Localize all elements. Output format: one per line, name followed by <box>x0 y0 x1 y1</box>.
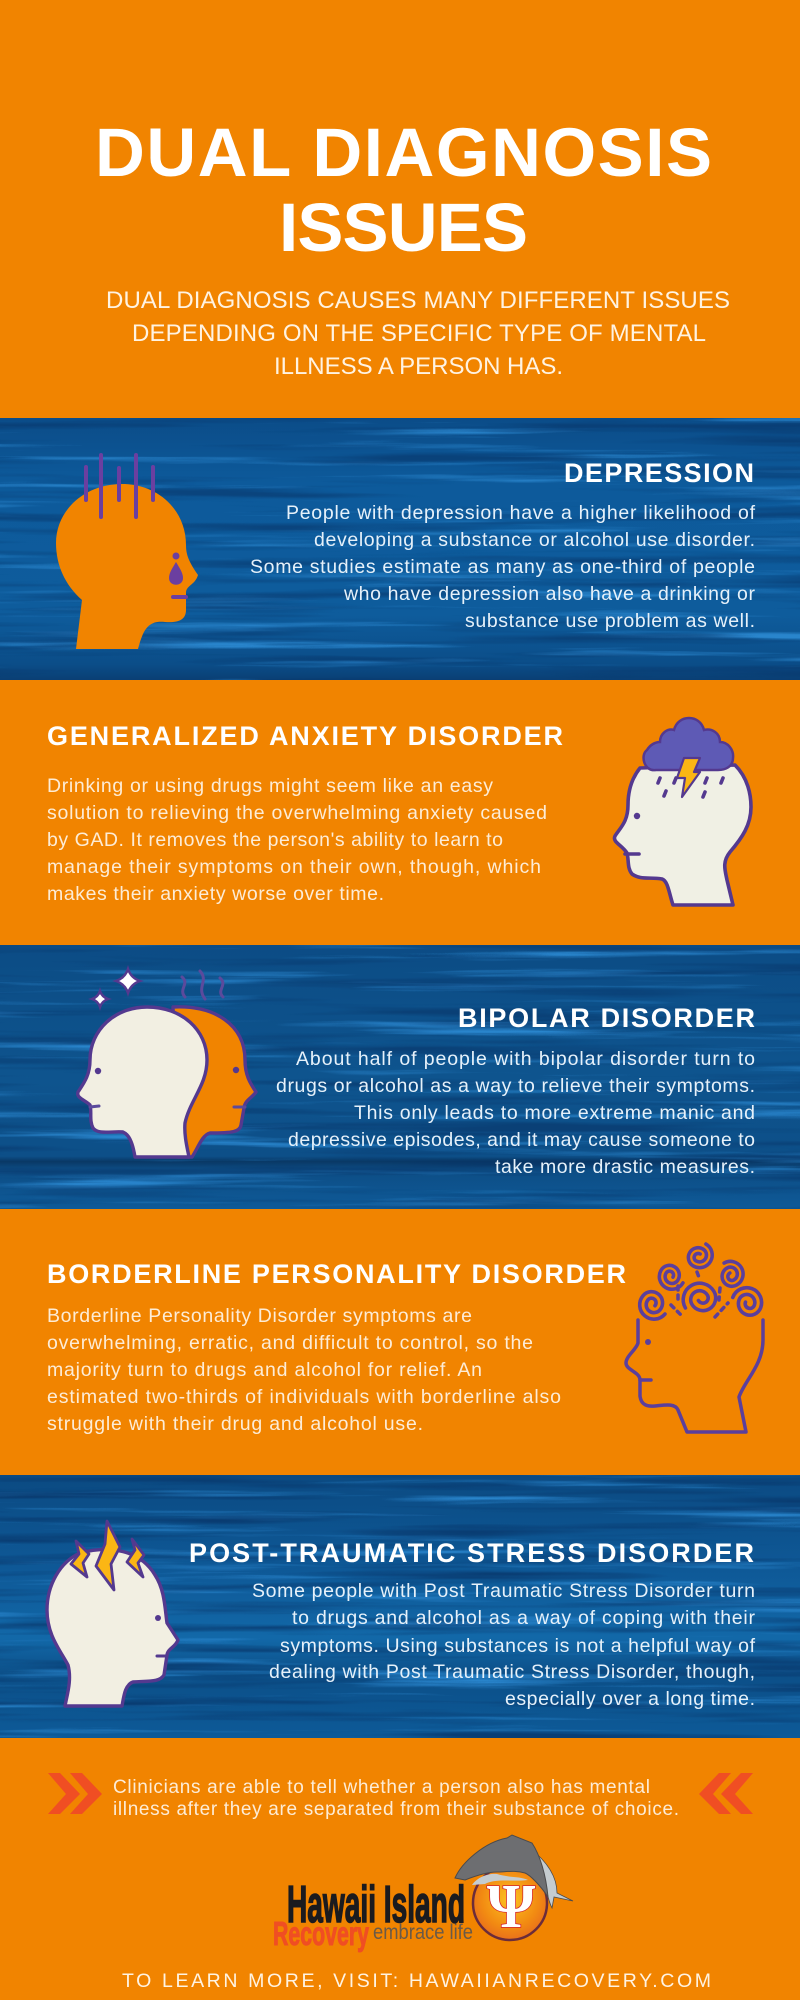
text: borderline personality disorder: struggle with their drug and alcohol use. <box>47 1413 423 1435</box>
icon: two faced heads <box>78 969 256 1157</box>
icon: head with spirals <box>626 1239 766 1432</box>
panel: bipolar disorder <box>0 945 800 1209</box>
panel: post-traumatic stress disorder <box>0 1475 800 1738</box>
text: bipolar disorder <box>276 1048 755 1178</box>
text: bipolar disorder: About half of people with bipolar disorder turn to <box>296 1048 755 1070</box>
text: post-traumatic stress disorder <box>252 1580 756 1710</box>
footer link: TO LEARN MORE, VISIT: HAWAIIANRECOVERY.COM <box>122 1970 711 1992</box>
text: borderline personality disorder: estimated two-thirds of individuals with borderline also <box>47 1386 561 1408</box>
heading: bipolar disorder: BIPOLAR DISORDER <box>458 1003 755 1033</box>
logo dolphins <box>455 1835 573 1908</box>
intro text <box>106 287 730 380</box>
logo wordmark <box>273 1876 473 1952</box>
logo <box>273 1835 573 1952</box>
header <box>95 114 730 380</box>
heading: depression: DEPRESSION <box>564 458 754 488</box>
heading: borderline personality disorder: BORDERLINE PERSONALITY DISORDER <box>47 1259 626 1289</box>
heading: post-traumatic stress disorder: POST-TRAUMATIC STRESS DISORDER <box>189 1538 754 1568</box>
text: bipolar disorder: take more drastic measures. <box>495 1156 755 1178</box>
text: post-traumatic stress disorder: dealing with Post Traumatic Stress Disorder, though, <box>269 1661 755 1683</box>
logo wordmark: embrace life <box>373 1921 473 1944</box>
text: depression <box>250 502 756 632</box>
icon: head with storm cloud <box>614 718 751 905</box>
text: bipolar disorder: depressive episodes, and it may cause someone to <box>288 1129 755 1151</box>
logo orb: Ψ <box>487 1873 536 1941</box>
text: generalized anxiety disorder: solution to relieving the overwhelming anxiety caused <box>47 802 547 824</box>
text: borderline personality disorder: Borderline Personality Disorder symptoms are <box>47 1305 472 1327</box>
text: generalized anxiety disorder: manage their symptoms on their own, though, which <box>47 856 541 878</box>
panel: borderline personality disorder <box>47 1239 766 1435</box>
text: borderline personality disorder: majority turn to drugs and alcohol for relief. An <box>47 1359 482 1381</box>
text: generalized anxiety disorder: makes their anxiety worse over time. <box>47 883 384 905</box>
arrow: right chevrons <box>699 1773 753 1814</box>
logo wordmark: Hawaii Island <box>287 1876 465 1934</box>
panel: depression <box>0 418 800 680</box>
text: depression: who have depression also have a drinking or <box>343 583 756 605</box>
intro text: DEPENDING ON THE SPECIFIC TYPE OF MENTAL <box>132 320 706 347</box>
callout text: Clinicians are able to tell whether a person also has mental <box>113 1777 650 1798</box>
arrow: left chevrons <box>48 1773 102 1814</box>
text: generalized anxiety disorder <box>47 775 547 905</box>
intro text: DUAL DIAGNOSIS CAUSES MANY DIFFERENT ISSUES <box>106 287 730 314</box>
text: generalized anxiety disorder: by GAD. It removes the person's ability to learn to <box>47 829 503 851</box>
icon: sad head <box>56 455 198 649</box>
text: bipolar disorder: drugs or alcohol as a way to relieve their symptoms. <box>276 1075 755 1097</box>
logo wordmark: Recovery <box>273 1915 369 1952</box>
intro text: ILLNESS A PERSON HAS. <box>274 353 563 380</box>
heading: generalized anxiety disorder: GENERALIZED ANXIETY DISORDER <box>47 721 563 751</box>
panel: generalized anxiety disorder <box>47 718 751 905</box>
callout text <box>113 1777 679 1820</box>
text: bipolar disorder: This only leads to more extreme manic and <box>354 1102 755 1124</box>
logo orb <box>473 1866 547 1941</box>
text: post-traumatic stress disorder: Some people with Post Traumatic Stress Disorder turn <box>252 1580 755 1602</box>
text: depression: People with depression have a higher likelihood of <box>286 502 756 524</box>
text: borderline personality disorder: overwhelming, erratic, and difficult to control, so the <box>47 1332 533 1354</box>
text: depression: substance use problem as well. <box>465 610 755 632</box>
text: borderline personality disorder <box>47 1305 561 1435</box>
text: post-traumatic stress disorder: to drugs and alcohol as a way of coping with their <box>292 1607 756 1629</box>
text: depression: Some studies estimate as many as one-third of people <box>250 556 755 578</box>
text: post-traumatic stress disorder: especially over a long time. <box>505 1688 755 1710</box>
callout <box>48 1773 753 1820</box>
icon: head with lightning <box>47 1521 178 1706</box>
callout text: illness after they are separated from their substance of choice. <box>113 1799 679 1820</box>
title: ISSUES <box>279 189 528 266</box>
text: depression: developing a substance or alcohol use disorder. <box>314 529 755 551</box>
text: generalized anxiety disorder: Drinking or using drugs might seem like an easy <box>47 775 493 797</box>
title <box>95 114 712 266</box>
title: DUAL DIAGNOSIS <box>95 114 712 191</box>
text: post-traumatic stress disorder: symptoms. Using substances is not a helpful way of <box>280 1635 756 1657</box>
